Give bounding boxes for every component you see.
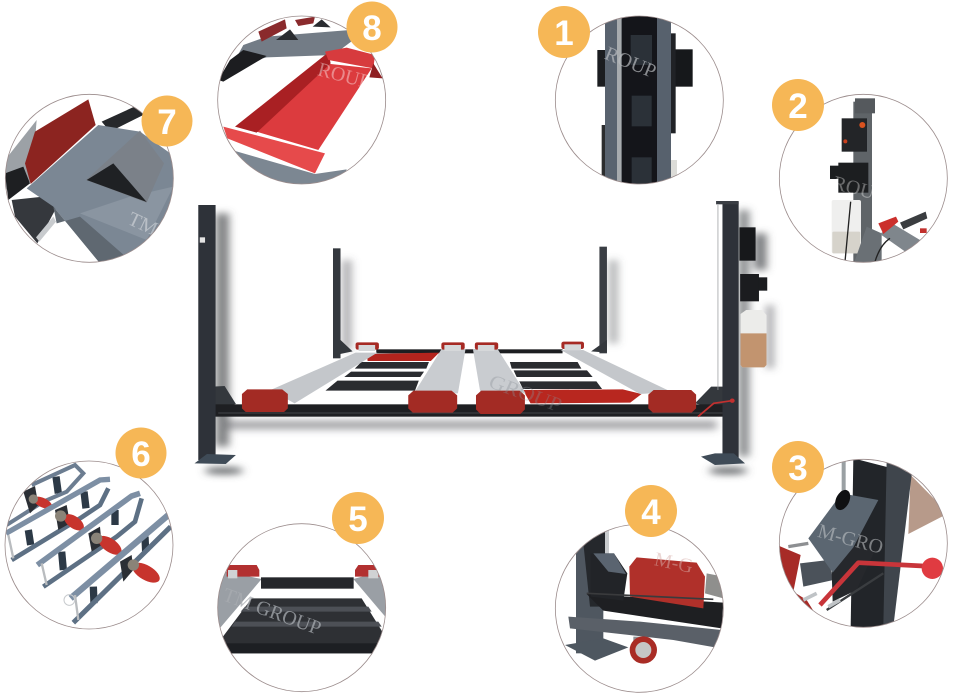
post side strip bbox=[883, 460, 912, 627]
stop pads bbox=[228, 570, 378, 578]
control box bbox=[842, 118, 867, 152]
rear wheel stops bbox=[356, 342, 584, 350]
plate shaded lower edge bbox=[53, 207, 133, 263]
watermark: ROUP bbox=[601, 43, 659, 83]
outline bbox=[218, 16, 386, 184]
gusset slot bbox=[832, 488, 853, 512]
grey backing bbox=[5, 120, 37, 190]
corner gussets bbox=[213, 340, 724, 410]
detail circle 6: caster jacking beams bbox=[5, 461, 173, 629]
left ramp bbox=[217, 570, 262, 630]
grey gusset bbox=[808, 493, 878, 573]
runway ramp 4 bbox=[561, 350, 672, 394]
watermark: GROUP bbox=[485, 370, 566, 416]
red wheel stop bbox=[25, 99, 96, 184]
left red stop bbox=[227, 565, 259, 577]
rod bbox=[587, 593, 713, 599]
black rail bbox=[102, 107, 142, 128]
release handle bbox=[698, 399, 734, 417]
connector bbox=[671, 33, 676, 134]
back red drip tray bbox=[367, 353, 439, 361]
stop button bbox=[859, 122, 865, 128]
beam unit 2 lower bbox=[12, 488, 108, 560]
locating pins bbox=[8, 535, 78, 620]
bracket bbox=[853, 227, 882, 265]
left post face bbox=[605, 13, 622, 187]
watermark: M-G bbox=[652, 548, 695, 578]
hydraulic motor bbox=[740, 274, 767, 301]
detail circle 5: deck grid bbox=[217, 524, 387, 692]
runway ramp 1 bbox=[271, 353, 377, 403]
right post face bbox=[657, 13, 671, 187]
caster wheels bbox=[32, 494, 163, 587]
front cross beam highlight bbox=[218, 412, 722, 414]
outline bbox=[779, 94, 947, 262]
foot plate bbox=[565, 638, 628, 661]
lift cast shadows bbox=[204, 210, 774, 474]
beam unit 4 lower bbox=[73, 527, 171, 623]
caster hub bbox=[635, 642, 651, 658]
beam unit 1 bbox=[7, 465, 83, 525]
badge 3 bbox=[772, 441, 824, 493]
post bbox=[851, 458, 912, 628]
beam unit 2 bbox=[6, 479, 110, 533]
badge 8 bbox=[346, 2, 398, 52]
tray inner side bbox=[235, 52, 331, 133]
silver rod bbox=[36, 217, 56, 242]
back cross beam bbox=[376, 349, 563, 353]
hose bbox=[845, 202, 851, 262]
tray front lip bbox=[223, 127, 325, 173]
red plate bbox=[779, 546, 815, 613]
front cross beam bbox=[211, 404, 724, 417]
grid bbox=[222, 598, 383, 653]
lower platform bbox=[236, 151, 347, 184]
runway ramp 3 bbox=[473, 349, 526, 393]
badge 7: 7 bbox=[157, 103, 177, 142]
cable bbox=[875, 238, 890, 262]
beam unit 3 bbox=[37, 493, 140, 565]
post bbox=[576, 540, 603, 653]
gusset top bbox=[593, 553, 626, 574]
post top bbox=[855, 98, 875, 113]
detail circle 7: diamond plate ramp end bbox=[5, 94, 175, 263]
black channel bbox=[622, 13, 657, 187]
outline bbox=[5, 94, 173, 262]
caster tyre bbox=[630, 636, 657, 664]
badge 2: 2 bbox=[788, 87, 808, 126]
detail circle 8: red drip tray bbox=[218, 16, 386, 188]
rear bumps bbox=[276, 19, 331, 40]
gusset bbox=[591, 553, 627, 601]
black block bbox=[832, 547, 875, 602]
plate bump bbox=[86, 131, 164, 203]
pin ring bbox=[64, 595, 75, 605]
outline bbox=[5, 461, 173, 629]
badge 1 bbox=[538, 6, 590, 58]
tray right lip bbox=[369, 63, 383, 78]
left black rail bbox=[218, 50, 267, 82]
post bbox=[853, 102, 872, 265]
red stop bbox=[878, 217, 898, 234]
tank bbox=[832, 200, 861, 253]
detail circle 3: release handle bbox=[779, 458, 948, 628]
post top dark bbox=[583, 530, 605, 607]
badge 5: 5 bbox=[348, 500, 368, 539]
front red drip tray bbox=[523, 389, 642, 403]
red handle bbox=[820, 563, 923, 605]
wheel mount plates bbox=[23, 486, 133, 582]
caster forks bbox=[29, 494, 139, 571]
badge 3: 3 bbox=[788, 449, 808, 488]
beam unit 4 bbox=[71, 515, 168, 598]
badge 4 bbox=[625, 485, 677, 537]
badge 4: 4 bbox=[641, 493, 661, 532]
left block bbox=[597, 50, 605, 87]
right ramp bbox=[353, 570, 387, 618]
grid rails bbox=[232, 607, 382, 627]
left post label bbox=[200, 237, 205, 243]
tension rod bbox=[827, 573, 883, 610]
tray rim bbox=[325, 48, 375, 68]
caster fork bbox=[633, 637, 643, 647]
grey platform bbox=[238, 30, 352, 58]
tan board bbox=[908, 475, 948, 534]
plate light patch bbox=[80, 187, 173, 240]
rungs bbox=[28, 477, 146, 603]
post cable bbox=[605, 528, 609, 555]
detail circle 2: power unit bbox=[779, 94, 947, 265]
runway ramp 2 bbox=[414, 349, 465, 393]
handle knob bbox=[922, 558, 943, 579]
watermark: ROUP bbox=[315, 59, 373, 94]
bottom left fitting bbox=[602, 125, 607, 178]
control box bbox=[739, 227, 756, 261]
chequer plate bbox=[27, 125, 175, 263]
right red stop bbox=[355, 565, 380, 577]
rod fittings bbox=[803, 593, 840, 607]
outline bbox=[218, 524, 386, 692]
beam unit 3 lower bbox=[43, 498, 142, 587]
back left post bbox=[333, 248, 341, 358]
left dark frame bbox=[5, 167, 30, 200]
badge 1: 1 bbox=[554, 14, 574, 53]
lift cable bbox=[717, 205, 719, 390]
right front post bbox=[722, 202, 739, 462]
bottom white fitting bbox=[671, 160, 677, 178]
badge 5 bbox=[332, 492, 384, 544]
safety slots bbox=[631, 35, 652, 187]
detail circle 4: crossbeam and caster bbox=[555, 524, 723, 692]
start button bbox=[843, 139, 847, 143]
badge 7 bbox=[142, 96, 192, 146]
left front post bbox=[198, 205, 216, 460]
black rail bbox=[900, 212, 927, 229]
cable bbox=[842, 460, 846, 493]
grey far side bbox=[705, 573, 723, 598]
red stop bbox=[629, 557, 705, 608]
oil level bbox=[832, 232, 860, 253]
right foot plate bbox=[701, 453, 745, 465]
grey ramp bbox=[880, 224, 928, 253]
bump opening bbox=[87, 163, 147, 202]
motor bbox=[830, 163, 868, 193]
main product: four-post car lift bbox=[195, 201, 774, 474]
tray floor bbox=[257, 63, 372, 150]
outline bbox=[555, 524, 723, 692]
outline bbox=[555, 16, 723, 184]
lower dark frame bbox=[12, 197, 56, 243]
watermark: M-GRO bbox=[815, 520, 885, 559]
red stop small bbox=[920, 228, 927, 233]
watermark: ROUP bbox=[830, 172, 888, 207]
crossbeam bbox=[587, 594, 723, 628]
watermark: TM bbox=[125, 208, 161, 241]
right block bbox=[675, 49, 693, 87]
rear bar bbox=[261, 577, 354, 589]
front bar bbox=[225, 643, 378, 653]
steel cable bbox=[617, 13, 621, 187]
detail circle 1: post and safety slots bbox=[555, 13, 723, 187]
left deck slats bbox=[325, 362, 429, 391]
badge 6: 6 bbox=[131, 435, 151, 474]
badge 8: 8 bbox=[362, 9, 382, 48]
front red wheel stops bbox=[242, 389, 696, 414]
badge 2 bbox=[772, 79, 824, 131]
right deck slats bbox=[510, 362, 602, 389]
dark arm bbox=[800, 560, 833, 587]
rods bbox=[788, 543, 808, 547]
front arm bbox=[568, 617, 722, 647]
outline bbox=[779, 459, 947, 627]
badge 6 bbox=[116, 428, 166, 478]
right post top bracket bbox=[716, 201, 739, 204]
left foot plate bbox=[195, 454, 236, 464]
back right post bbox=[599, 247, 607, 353]
watermark: TM GROUP bbox=[220, 584, 324, 640]
oil tank bbox=[741, 310, 766, 367]
rear red stops bbox=[258, 17, 315, 42]
